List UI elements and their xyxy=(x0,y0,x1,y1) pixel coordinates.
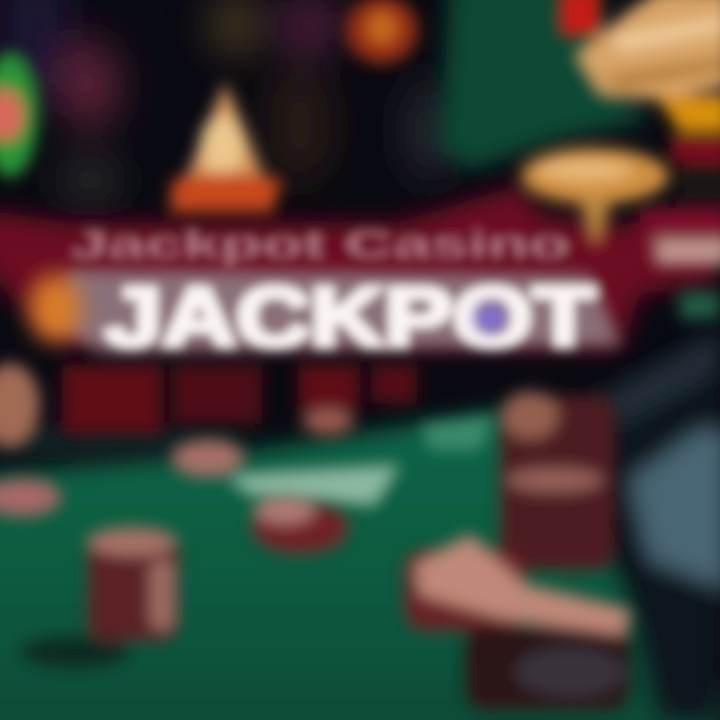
chip stacks: centre xyxy=(172,406,354,553)
playing cards on table xyxy=(225,415,495,505)
background: green wall upper right xyxy=(440,0,650,170)
right red and white stripe xyxy=(640,208,720,320)
purple highlight in title xyxy=(474,304,506,332)
icon: flame cone xyxy=(170,82,282,212)
player silhouette at right xyxy=(580,320,720,720)
icon: golden trophy dish xyxy=(521,148,669,245)
title line 2: JACKPOT xyxy=(105,270,595,364)
background: upper casino wall xyxy=(0,0,452,205)
table edge shadow xyxy=(0,430,240,452)
chip stacks: lower right xyxy=(405,391,630,710)
icon: green slot emblem at left xyxy=(0,53,38,177)
red banner behind title xyxy=(0,185,720,350)
red pillars below title xyxy=(62,365,417,433)
title text xyxy=(70,224,595,364)
icon: top-right gold structure xyxy=(560,0,720,202)
chip stack: left edge upper xyxy=(0,363,60,515)
title line 1: Jackpot Casino xyxy=(70,224,570,266)
icon: orange ornament top xyxy=(346,0,418,64)
green felt table xyxy=(0,410,720,720)
orange glow at left of title xyxy=(29,274,81,342)
chip stack: lower left xyxy=(20,528,178,668)
title: glowing plate xyxy=(45,270,620,352)
